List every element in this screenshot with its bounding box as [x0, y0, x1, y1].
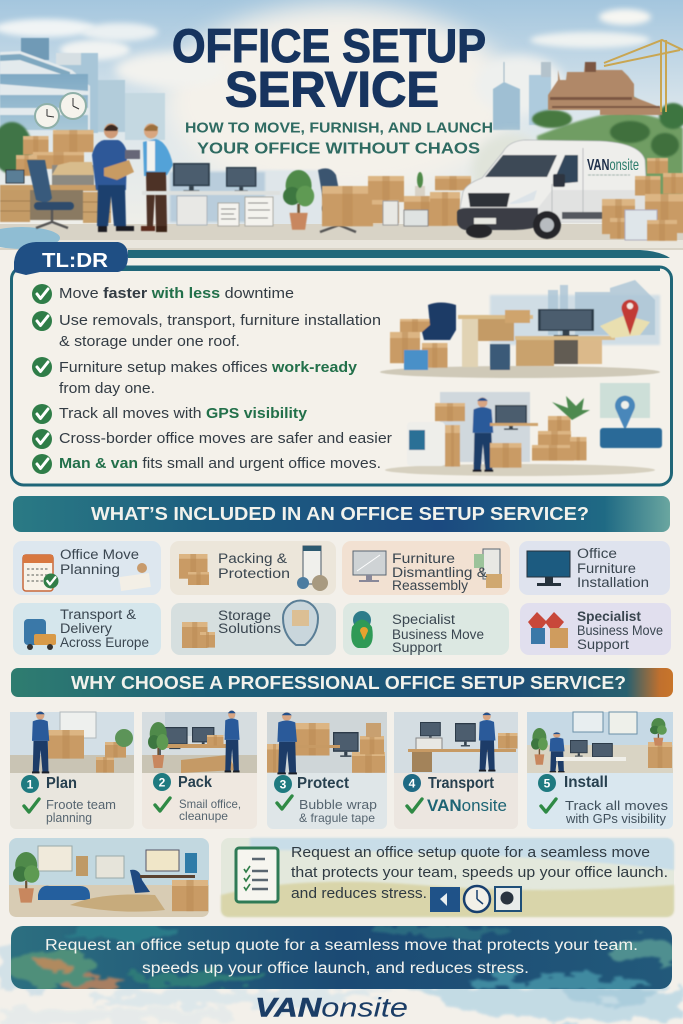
card: storage solutions: Solutions — [218, 621, 281, 636]
panel: TL;DR — [12, 242, 672, 485]
step 5: install: Install — [564, 774, 608, 791]
call to action banner — [0, 924, 683, 1024]
bullet: man and van: Man & van fits small and urgent office moves. — [59, 455, 381, 472]
ground — [0, 224, 683, 250]
card: specialist support violet: Business Move — [577, 623, 663, 638]
section heading: what's included: WHAT’S INCLUDED IN AN OFFICE SETUP SERVICE? — [91, 504, 589, 524]
card: transport and delivery — [13, 603, 161, 655]
title: OFFICE SETUP — [172, 19, 486, 72]
subtitle: YOUR OFFICE WITHOUT CHAOS — [197, 140, 480, 158]
bullet: one roof: & storage under one roof. — [59, 333, 240, 350]
clocks — [35, 93, 86, 128]
bullet: work-ready: from day one. — [59, 380, 155, 397]
step 5: install: 5 — [544, 776, 551, 790]
step 2: pack: Smail office, — [179, 797, 241, 811]
step 2: pack: 2 — [159, 776, 166, 790]
icons: speaker, stopwatch, shield — [430, 886, 521, 912]
card: packing and protection — [170, 541, 336, 595]
illustration: office furniture and map pin — [380, 280, 660, 378]
section heading: what's included — [13, 496, 670, 532]
card: dismantling and reassembly: Reassembly — [392, 578, 468, 593]
two people talking — [92, 124, 173, 232]
card: packing and protection: Packing & — [218, 551, 287, 566]
call to action banner: speeds up your office launch, and reduces stress. — [142, 960, 529, 977]
subtitle: HOW TO MOVE, FURNISH, AND LAUNCH — [185, 120, 493, 136]
illustration: worker at desk with location pin — [385, 383, 662, 476]
step 5: install — [527, 712, 673, 829]
bullet: cross-border: Cross-border office moves are safer and easier — [59, 430, 392, 447]
card: transport and delivery: Transport & — [60, 607, 136, 622]
step 2: pack: cleanupe — [179, 809, 228, 823]
van logo: VANonsite — [587, 157, 639, 174]
step 3: protect: Protect — [297, 775, 349, 792]
card: furniture installation: Office — [577, 546, 617, 561]
crane — [604, 40, 683, 112]
card: storage solutions — [171, 600, 336, 655]
title: SERVICE — [225, 62, 439, 118]
subtitle — [185, 120, 493, 158]
card: office move planning: Planning — [60, 562, 120, 577]
card: specialist support violet: Support — [577, 637, 629, 652]
centre desk with monitors — [142, 163, 280, 226]
hillside — [537, 111, 683, 215]
bullet: one roof: Use removals, transport, furniture installation — [59, 312, 381, 329]
icon: clipboard checklist — [236, 848, 278, 902]
step 1: plan — [10, 711, 134, 829]
VANonsite logo: VAN onsite — [255, 992, 408, 1022]
service cards — [13, 541, 671, 655]
step 3: protect: Bubble wrap — [299, 798, 377, 812]
skyline right — [493, 62, 551, 130]
bullet: move faster: Move faster with less downtime — [59, 285, 294, 302]
step 5: install: Track all moves — [565, 798, 669, 813]
step 1: plan: Froote team — [46, 798, 116, 812]
card: specialist support green: Business Move — [392, 627, 484, 642]
step 1: plan: planning — [46, 811, 92, 825]
card: transport and delivery: Delivery — [60, 621, 112, 636]
card: storage solutions: Storage — [218, 608, 271, 623]
card: transport and delivery: Across Europe — [60, 635, 149, 650]
card: dismantling and reassembly: Dismantling & — [392, 565, 487, 580]
boxes right — [602, 158, 683, 241]
call to action banner: Request an office setup quote for a seamless move that protects your team. — [45, 937, 638, 954]
callout: request a quote: that protects your team, speeds up your office launch. — [291, 864, 668, 881]
section heading: why choose: WHY CHOOSE A PROFESSIONAL OFFICE SETUP SERVICE? — [71, 673, 626, 693]
castle — [548, 62, 662, 115]
TL;DR tab: TL:DR — [42, 250, 109, 272]
step 4: transport: Transport — [428, 775, 494, 792]
card: packing and protection: Protection — [218, 566, 290, 581]
card: specialist support green: Specialist — [392, 612, 455, 627]
wall, partitions — [160, 170, 330, 225]
process steps — [10, 710, 673, 829]
card: dismantling and reassembly: Furniture — [392, 551, 455, 566]
step 5: install: with GPs visibility — [565, 812, 667, 826]
trees left — [0, 122, 32, 174]
bullet: work-ready: Furniture setup makes offices work-ready — [59, 359, 358, 376]
step 3: protect: & fragule tape — [299, 811, 375, 825]
illustration: finished office — [9, 838, 209, 917]
step 4: transport: 4 — [409, 776, 416, 790]
clouds and pale centre wash — [0, 5, 651, 195]
step 3: protect — [267, 712, 387, 829]
step 4: transport: VANonsite — [427, 796, 507, 815]
card: specialist support violet — [520, 603, 671, 655]
section heading: why choose — [11, 668, 673, 697]
card: dismantling and reassembly — [342, 541, 510, 595]
bullet: work-ready — [32, 357, 358, 397]
step 2: pack: Pack — [178, 774, 212, 791]
centre box stacks — [322, 172, 471, 226]
step 2: pack — [142, 710, 257, 829]
office buildings — [0, 38, 165, 140]
card: specialist support green — [343, 603, 509, 655]
plant — [283, 170, 314, 230]
callout: request a quote: and reduces stress. — [291, 885, 427, 902]
step 3: protect: 3 — [280, 778, 287, 792]
card: furniture installation — [519, 541, 670, 595]
step 1: plan: Plan — [46, 775, 77, 792]
hero illustration — [0, 0, 683, 250]
chair centre — [318, 168, 359, 232]
boxes and desk left — [0, 130, 111, 223]
card: specialist support violet: Specialist — [577, 609, 642, 624]
step 1: plan: 1 — [27, 778, 34, 792]
card: office move planning: Office Move — [60, 547, 139, 562]
white van — [457, 140, 648, 239]
title — [172, 19, 486, 118]
bullet: GPS: Track all moves with GPS visibility — [59, 405, 308, 422]
card: furniture installation: Installation — [577, 575, 649, 590]
bullet: one roof — [32, 311, 381, 350]
callout: request a quote: Request an office setup quote for a seamless move — [291, 844, 650, 861]
TL;DR tab — [14, 242, 128, 275]
card: specialist support green: Support — [392, 640, 442, 655]
step 4: transport — [394, 712, 518, 829]
callout: request a quote — [221, 838, 674, 917]
office chair left — [27, 160, 74, 228]
card: furniture installation: Furniture — [577, 561, 636, 576]
card: office move planning — [13, 541, 161, 595]
